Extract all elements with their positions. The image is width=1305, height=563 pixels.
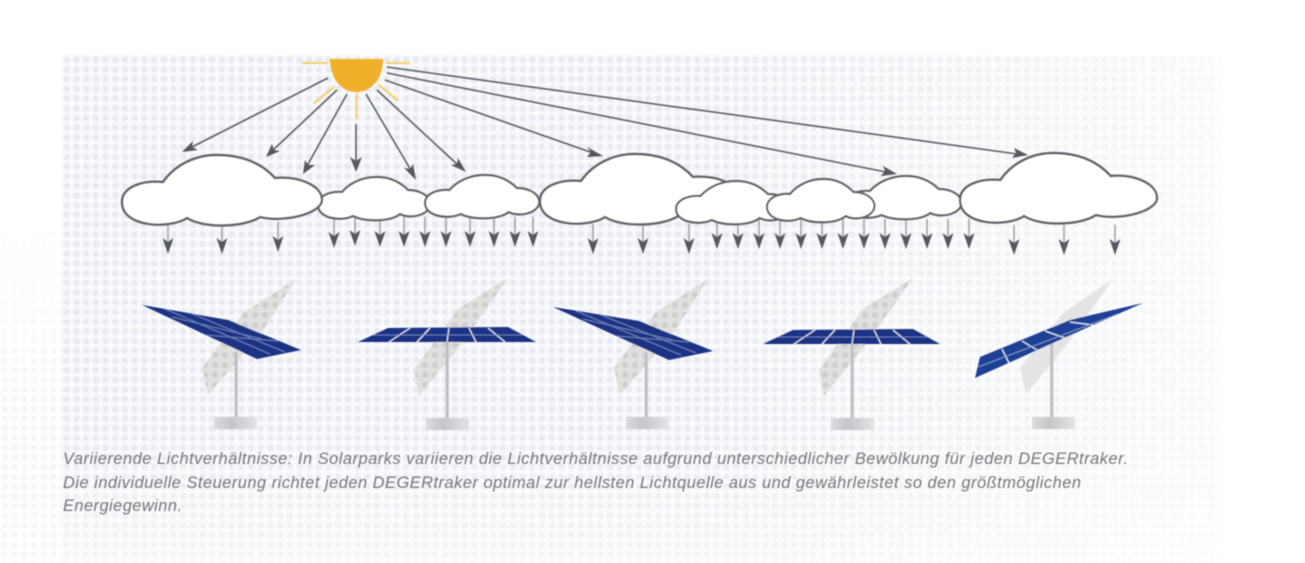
arrows: light below clouds — [162, 216, 1120, 255]
caption: Energiegewinn. — [63, 497, 182, 515]
sun rays — [303, 63, 409, 118]
caption: Die individuelle Steuerung richtet jeden DEGERtraker optimal zur hellsten Lichtquelle aus und gewährleistet so den größtmöglichen — [63, 474, 1081, 492]
solar tracker 2: horizontal — [358, 278, 536, 430]
solar tracker 3: tilted — [553, 279, 713, 429]
caption: Variierende Lichtverhältnisse: In Solarparks variieren die Lichtverhältnisse aufgrund unterschiedlicher Bewölkung für jeden DEGERtraker. — [63, 450, 1128, 468]
caption — [63, 450, 1128, 515]
icon: sun disc — [330, 59, 383, 92]
sun — [303, 59, 409, 118]
clouds — [122, 153, 1157, 225]
solar tracker 1: tilted — [142, 279, 301, 429]
solar tracker 4: horizontal — [763, 278, 940, 430]
solar tracker 5: tilted opposite — [975, 279, 1143, 429]
arrows: sunlight rays to clouds — [182, 67, 1028, 180]
